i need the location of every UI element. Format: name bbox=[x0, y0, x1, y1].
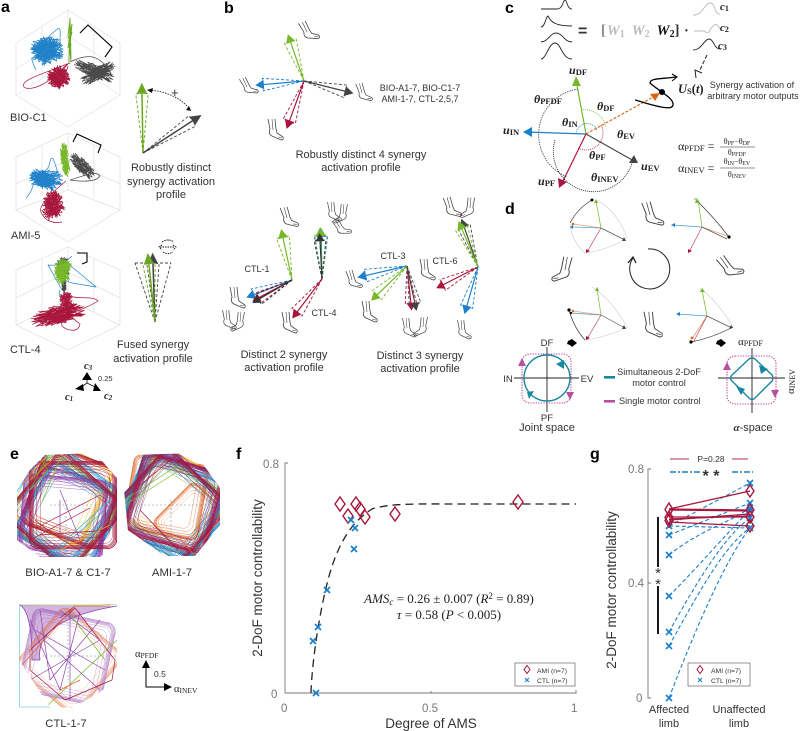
3D trajectory: CTL-4 bbox=[16, 247, 120, 350]
legend bbox=[688, 663, 750, 686]
CTL paired lines bbox=[669, 483, 750, 698]
vector diagram: θ bbox=[589, 148, 595, 162]
legend: motor control: Simultaneous 2-DoF bbox=[617, 367, 701, 377]
synergy activation curves: c bbox=[720, 1, 725, 13]
formulas: PFDF bbox=[732, 152, 747, 158]
arrows: robustly distinct 4 synergy bbox=[239, 18, 373, 140]
significance: affected vs.: * bbox=[655, 565, 661, 582]
vector diagram: θ bbox=[591, 170, 597, 184]
formulas bbox=[678, 137, 755, 180]
caption: distinct 2: Distinct 2 synergy bbox=[241, 349, 328, 361]
label: CTL-4: CTL-4 bbox=[10, 344, 41, 356]
caption: robustly distinct synergy activation profile: synergy activation bbox=[127, 176, 215, 188]
3D trajectory: BIO-C1 bbox=[16, 10, 120, 127]
vector diagram: u bbox=[538, 174, 545, 188]
formulas: −θ bbox=[734, 157, 742, 166]
note: synergy activation: arbitrary motor outputs bbox=[707, 91, 799, 101]
label: U_S(t): t) bbox=[696, 82, 704, 96]
panel: f bbox=[236, 446, 577, 731]
vector diagram bbox=[503, 63, 660, 192]
synergy activation curves: 3 bbox=[723, 43, 727, 52]
equation: synergy matrix: W bbox=[632, 23, 646, 39]
fit equation: R bbox=[480, 591, 488, 606]
vector diagram: θ bbox=[534, 92, 540, 106]
vector diagram: PF bbox=[595, 152, 606, 162]
label: U_S(t): S bbox=[687, 86, 692, 96]
equation: synergy matrix: 2 bbox=[645, 29, 650, 40]
legend: motor control bbox=[604, 367, 701, 406]
3D trajectory: AMI-5 bbox=[16, 133, 120, 242]
panel: e bbox=[10, 450, 220, 727]
scale: alpha axes: INEV bbox=[180, 686, 198, 695]
x labels: Unaffected bbox=[712, 704, 766, 716]
significance: AMI bbox=[670, 454, 748, 464]
arrow: cycle bbox=[628, 249, 670, 289]
arrows: CTL-1 and CTL-4: CTL-1 bbox=[244, 264, 270, 274]
x labels: limb bbox=[729, 718, 749, 730]
vector diagram: PFDF bbox=[540, 96, 562, 106]
label: joint space: Joint space bbox=[519, 422, 575, 434]
chart axes bbox=[628, 464, 651, 705]
caption: robustly distinct 4: Robustly distinct 4 synergy bbox=[296, 149, 427, 161]
label: U_S(t): ( bbox=[692, 82, 696, 96]
arrow diagram: fused bbox=[135, 234, 176, 323]
phase diagram: top right bbox=[671, 198, 731, 253]
arrows: CTL-3 and CTL-6 bbox=[346, 195, 484, 339]
fit equation bbox=[363, 591, 534, 622]
formulas: INEV bbox=[732, 174, 747, 180]
legend: AMI (n=7) bbox=[537, 668, 567, 675]
significance: CTL bbox=[670, 468, 753, 485]
scale: alpha axes: α bbox=[174, 684, 180, 695]
panel: d bbox=[503, 198, 797, 434]
AMI markers bbox=[665, 485, 754, 532]
chart axes: 0 bbox=[271, 689, 277, 701]
heading: d: d bbox=[505, 201, 515, 218]
formulas: PFDF bbox=[684, 143, 705, 153]
significance: affected vs. bbox=[655, 517, 661, 634]
arrow diagram: robustly distinct: + bbox=[171, 85, 179, 100]
equation: synergy matrix: 2 bbox=[670, 29, 675, 40]
vector diagram: u bbox=[569, 63, 576, 77]
equation: equals: = bbox=[578, 23, 587, 40]
vector diagram: u bbox=[641, 159, 648, 173]
heading: e: e bbox=[10, 446, 19, 463]
chart axes: 0.5 bbox=[422, 703, 438, 715]
formulas: θ bbox=[724, 137, 728, 146]
markers: CTL bbox=[310, 517, 358, 696]
caption: fused synergy activation profile: activation profile bbox=[113, 353, 193, 365]
caption: fused synergy activation profile: Fused synergy bbox=[117, 339, 190, 351]
formulas: INEV bbox=[684, 165, 705, 175]
synergy activation curves: c bbox=[718, 40, 723, 52]
y axis label: 2-DoF motor controllability bbox=[250, 499, 265, 657]
scale: c axes: c bbox=[65, 392, 70, 403]
fit equation: = 0.89) bbox=[493, 591, 534, 606]
heading: f: f bbox=[236, 446, 242, 463]
synergy activation curves: 2 bbox=[725, 25, 729, 34]
equation: synergy matrix: · bbox=[680, 23, 689, 39]
panel: a bbox=[1, 0, 215, 403]
significance: AMI: P=0.28 bbox=[697, 454, 725, 464]
label: BIO: BIO-A1-7 & C1-7 bbox=[25, 567, 111, 579]
label: CTL: CTL-1-7 bbox=[45, 718, 87, 730]
panel: b bbox=[222, 0, 484, 375]
alpha space plot: α bbox=[785, 388, 797, 394]
AMI paired lines bbox=[669, 491, 750, 526]
arrows: CTL-3 and CTL-6: CTL-3 bbox=[380, 251, 406, 261]
chart axes: 1 bbox=[571, 703, 577, 715]
caption: distinct 3: activation profile bbox=[380, 363, 460, 375]
note: synergy activation bbox=[707, 80, 799, 101]
formulas: IN bbox=[728, 161, 735, 167]
vector diagram: PF bbox=[545, 178, 555, 188]
label: AMI: AMI-1-7 bbox=[152, 567, 192, 579]
scale: c axes: 0.25 bbox=[98, 374, 113, 383]
equation: synergy matrix: 1 bbox=[620, 29, 625, 40]
alpha space plot: INEV bbox=[788, 369, 797, 388]
caption: robustly distinct 4 bbox=[296, 149, 427, 174]
label: alpha space: α-space bbox=[733, 422, 773, 434]
chart axes: 0.4 bbox=[628, 578, 645, 590]
note: subject list: AMI-1-7, CTL-2,5,7 bbox=[381, 94, 459, 104]
caption: robustly distinct synergy activation profile bbox=[127, 162, 215, 201]
muscle activation curves bbox=[541, 0, 572, 59]
fit equation: τ = 0.58 (P < 0.005) bbox=[397, 607, 501, 622]
vector diagram: EV bbox=[623, 131, 636, 141]
formulas: −θ bbox=[734, 137, 743, 146]
note: subject list: BIO-A1-7, BIO-C1-7 bbox=[380, 83, 460, 93]
label: U_S(t): U bbox=[678, 82, 687, 96]
scale: alpha axes: 0.5 bbox=[154, 669, 166, 679]
formulas: θ bbox=[728, 148, 732, 157]
legend: motor control: motor control bbox=[632, 378, 686, 388]
x labels bbox=[649, 704, 766, 730]
significance: affected vs.: * bbox=[655, 576, 661, 593]
heading: b: b bbox=[224, 0, 234, 17]
legend: motor control: Single motor control bbox=[619, 396, 701, 406]
trajectories: CTL bundle bbox=[19, 604, 117, 708]
heading: g: g bbox=[590, 446, 600, 463]
formulas: θ bbox=[724, 157, 728, 166]
joint space plot: DF bbox=[541, 338, 554, 349]
caption: distinct 3 bbox=[377, 350, 464, 375]
note: subject list bbox=[380, 83, 460, 104]
heading: c: c bbox=[505, 0, 514, 17]
scale: alpha axes: PFDF bbox=[141, 651, 158, 660]
vector diagram: θ bbox=[562, 115, 568, 129]
chart axes: 0.8 bbox=[628, 464, 644, 476]
joint space plot: PF bbox=[541, 413, 553, 424]
trajectories: AMI bbox=[124, 454, 220, 556]
chart axes: 0 bbox=[281, 703, 287, 715]
synergy activation curves: c bbox=[720, 22, 725, 34]
panel: c bbox=[503, 0, 799, 192]
vector diagram: θ bbox=[617, 127, 623, 141]
fit equation: = 0.26 ± 0.007 ( bbox=[393, 591, 480, 606]
arrow: dashed to U_s bbox=[695, 55, 707, 78]
alpha space plot: PFDF bbox=[744, 339, 763, 348]
arrows: CTL-1 and CTL-4 bbox=[222, 202, 352, 333]
trajectories: BIO bbox=[17, 454, 117, 557]
scale: c axes: c bbox=[84, 361, 89, 372]
chart axes: 0.8 bbox=[263, 459, 279, 471]
x labels: limb bbox=[659, 718, 679, 730]
formulas: DF bbox=[743, 141, 751, 147]
synergy activation curves bbox=[693, 1, 729, 52]
synergy activation curves: 1 bbox=[725, 4, 729, 13]
joint space plot bbox=[503, 338, 594, 424]
caption: robustly distinct 4: activation profile bbox=[321, 162, 401, 174]
alpha space plot bbox=[718, 336, 797, 413]
legend bbox=[515, 663, 575, 686]
formulas: EV bbox=[742, 161, 751, 167]
label: BIO-C1: BIO-C1 bbox=[10, 112, 47, 124]
fit curve bbox=[311, 504, 576, 693]
formulas: = bbox=[705, 139, 715, 153]
formulas: α bbox=[678, 139, 684, 153]
arrows: small black block arrows bbox=[567, 339, 726, 347]
legend: CTL (n=7) bbox=[711, 678, 742, 685]
formulas: θ bbox=[728, 170, 732, 179]
legend: AMI (n=7) bbox=[711, 668, 741, 675]
arrows: CTL-1 and CTL-4: CTL-4 bbox=[311, 308, 337, 318]
scale: c axes bbox=[65, 361, 113, 403]
caption: distinct 3: Distinct 3 synergy bbox=[377, 350, 464, 362]
arrow diagram: fused: - bbox=[166, 234, 170, 246]
joint space plot: IN bbox=[503, 374, 513, 385]
alpha space plot: α bbox=[738, 336, 744, 348]
equation: synergy matrix: [W bbox=[601, 23, 620, 39]
x axis label: Degree of AMS bbox=[385, 716, 477, 731]
label: AMI-5: AMI-5 bbox=[11, 230, 40, 242]
caption: distinct 2: activation profile bbox=[244, 362, 324, 374]
fit equation: c bbox=[389, 597, 393, 607]
y axis label: 2-DoF motor controllability bbox=[604, 511, 619, 669]
note: synergy activation: Synergy activation of bbox=[710, 80, 795, 90]
scale: c axes: 2 bbox=[108, 394, 113, 402]
vector diagram: DF bbox=[603, 103, 615, 113]
equation: synergy matrix: ] bbox=[675, 23, 679, 39]
significance: CTL: * * bbox=[703, 468, 720, 485]
panel: g bbox=[590, 446, 766, 730]
scale: alpha axes: α bbox=[135, 649, 141, 660]
vector diagram: IN bbox=[510, 127, 520, 137]
scale: c axes: 1 bbox=[70, 395, 73, 403]
legend: CTL (n=7) bbox=[537, 678, 568, 685]
chart axes bbox=[263, 459, 577, 715]
scale: c axes: 3 bbox=[88, 364, 93, 372]
scale: alpha axes bbox=[135, 649, 198, 695]
vector diagram: u bbox=[503, 123, 510, 137]
formulas: = bbox=[705, 161, 715, 175]
fit equation: 2 bbox=[488, 591, 493, 601]
vector diagram: EV bbox=[648, 163, 660, 173]
caption: distinct 2 bbox=[241, 349, 328, 374]
vector diagram: INEV bbox=[597, 174, 619, 184]
caption: robustly distinct synergy activation profile: Robustly distinct bbox=[131, 162, 211, 174]
trajectory: arbitrary motor output bbox=[635, 74, 677, 108]
phase diagram: bottom left bbox=[567, 287, 627, 340]
formulas: α bbox=[678, 161, 684, 175]
caption: robustly distinct synergy activation profile: profile bbox=[156, 189, 186, 201]
CTL markers bbox=[666, 480, 753, 701]
arrow diagram: robustly distinct bbox=[136, 83, 205, 158]
chart axes: 0 bbox=[636, 693, 642, 705]
equation: synergy matrix: W bbox=[657, 23, 671, 39]
markers: AMI bbox=[335, 495, 523, 524]
feet icons around the cycle bbox=[552, 200, 745, 337]
vector diagram: θ bbox=[597, 99, 603, 113]
formulas: PF bbox=[728, 141, 735, 147]
arrows: CTL-3 and CTL-6: CTL-6 bbox=[432, 256, 458, 266]
joint space plot: EV bbox=[581, 374, 594, 385]
phase diagram: top left bbox=[570, 198, 627, 253]
vector diagram: IN bbox=[568, 119, 579, 129]
x labels: Affected bbox=[649, 704, 689, 716]
caption: fused synergy activation profile bbox=[113, 339, 193, 365]
phase diagram: bottom right bbox=[676, 288, 733, 344]
vector diagram: DF bbox=[576, 67, 587, 77]
scale: c axes: c bbox=[104, 391, 109, 402]
trajectories: CTL bbox=[20, 604, 50, 707]
fit equation: AMS bbox=[364, 591, 389, 606]
